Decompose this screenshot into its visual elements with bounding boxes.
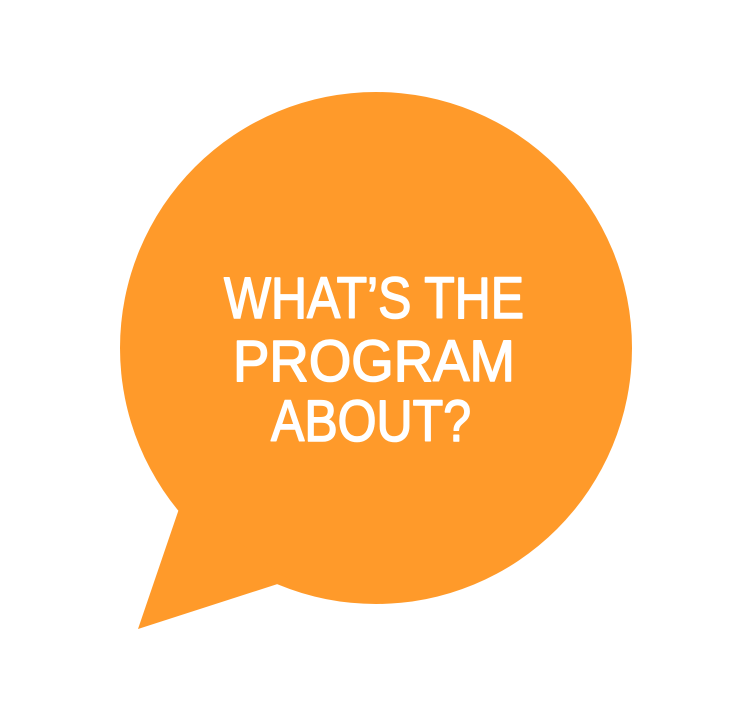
- heading text: PROGRAM: [233, 329, 515, 394]
- heading text: ABOUT?: [271, 389, 471, 454]
- heading text: [224, 266, 524, 454]
- bubble body: [120, 92, 632, 629]
- heading text: WHAT’S THE: [224, 266, 524, 331]
